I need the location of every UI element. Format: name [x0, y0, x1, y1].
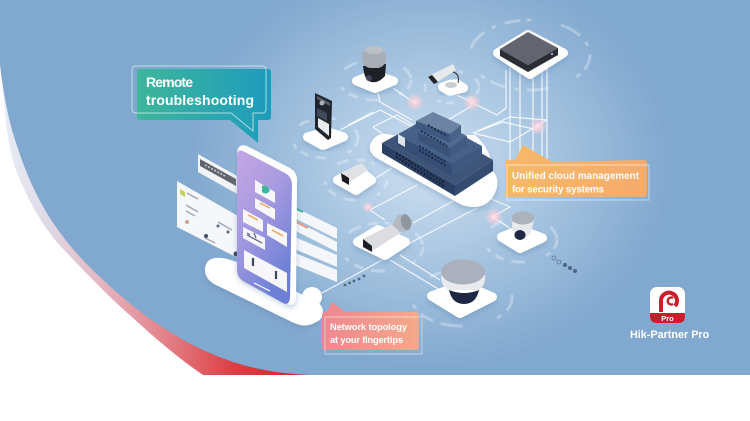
callout: Network topology [322, 302, 422, 354]
callout: Unified cloud management: Unified cloud management [512, 171, 640, 182]
right info panels [290, 205, 337, 282]
icon: app tile: Pro [661, 314, 674, 323]
device: bullet camera (lower) [341, 213, 423, 271]
callout: Remote troubleshooting: Remote [146, 74, 193, 90]
callout: Unified cloud management [505, 145, 649, 200]
device: large dome camera [412, 260, 512, 326]
device: bullet camera (top) [425, 64, 479, 103]
device: door station [292, 93, 358, 158]
device: network switch stack on cloud [370, 112, 498, 207]
callout: Remote troubleshooting [132, 66, 271, 143]
phone screen [237, 150, 292, 304]
app logo: Hik-Partner Pro [630, 287, 710, 341]
phone base cloud [205, 258, 323, 326]
device: PTZ camera [339, 46, 411, 100]
callout: Network topology: at your fingertips [330, 335, 403, 345]
device: NVR recorder [470, 20, 590, 90]
callout: Network topology: Network topology [330, 322, 408, 332]
decorative dots: right [552, 256, 577, 273]
network connection lines [322, 68, 547, 293]
callout: Remote troubleshooting: troubleshooting [146, 92, 254, 108]
panel: device thumbnail [198, 154, 239, 195]
panel: site overview [177, 181, 238, 258]
device: small box camera [325, 160, 387, 200]
phone screen cards [243, 180, 287, 292]
network node glow spots [362, 93, 547, 226]
phone [237, 145, 297, 305]
callout: Unified cloud management: for security systems [512, 184, 605, 196]
left info panels [177, 154, 239, 258]
label: app name: Hik-Partner Pro [630, 329, 710, 341]
device: small dome camera [485, 212, 557, 262]
decorative dots: left [344, 275, 365, 286]
